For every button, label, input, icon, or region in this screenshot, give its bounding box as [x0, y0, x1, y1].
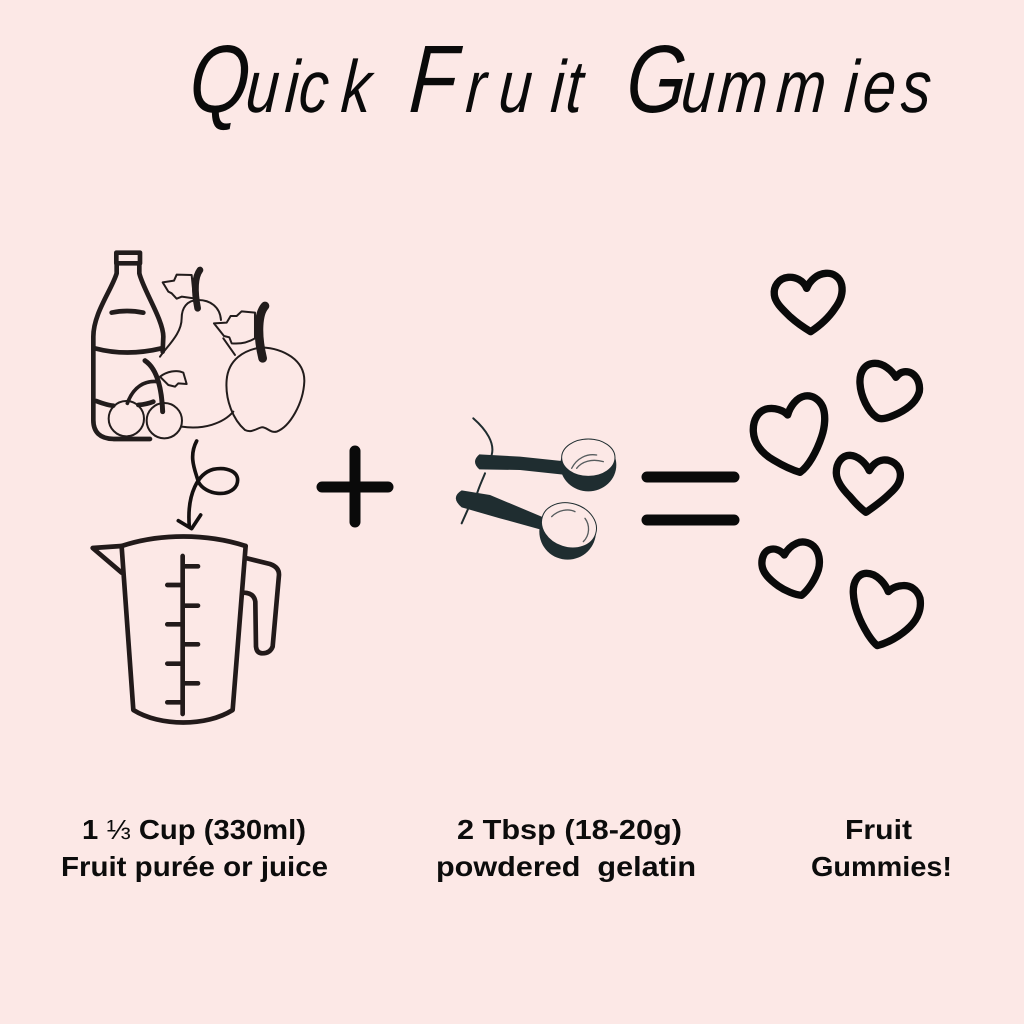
title: G: [623, 26, 691, 133]
label: powdered gelatin: powdered gelatin: [436, 851, 696, 882]
label: fruit puree or juice: 1 ⅓ Cup (330ml): [82, 814, 306, 845]
apple: [226, 347, 304, 432]
arrow: looped arrow to jug: [178, 441, 238, 529]
label: powdered gelatin: 2 Tbsp (18-20g): [457, 814, 682, 845]
label: fruit puree or juice: [61, 814, 328, 882]
icon: measuring jug: [93, 536, 279, 722]
title: Q: [187, 26, 254, 133]
curved line: [462, 418, 492, 523]
bottle: [93, 253, 163, 439]
label: fruit puree or juice: Fruit purée or juice: [61, 851, 328, 882]
title: uick: [244, 46, 377, 129]
icon: equals sign: [647, 477, 734, 520]
icon: measuring spoons: [456, 418, 616, 560]
pear: [160, 300, 235, 428]
icon: bottle and fruit: [93, 253, 304, 439]
title: F: [407, 26, 465, 133]
bottom spoon: [456, 490, 602, 560]
label: fruit gummies: [811, 814, 952, 882]
label: fruit gummies: Fruit: [845, 814, 912, 845]
label: powdered gelatin: [436, 814, 696, 882]
icon: gummy hearts: [753, 273, 920, 646]
icon: plus sign: [322, 451, 388, 522]
top spoon: [475, 439, 616, 491]
title: [187, 26, 936, 133]
label: fruit gummies: Gummies!: [811, 851, 952, 882]
title: ruit: [464, 46, 588, 129]
cherries: [109, 401, 144, 436]
scale marks: [167, 556, 198, 714]
title: ummies: [679, 46, 934, 129]
